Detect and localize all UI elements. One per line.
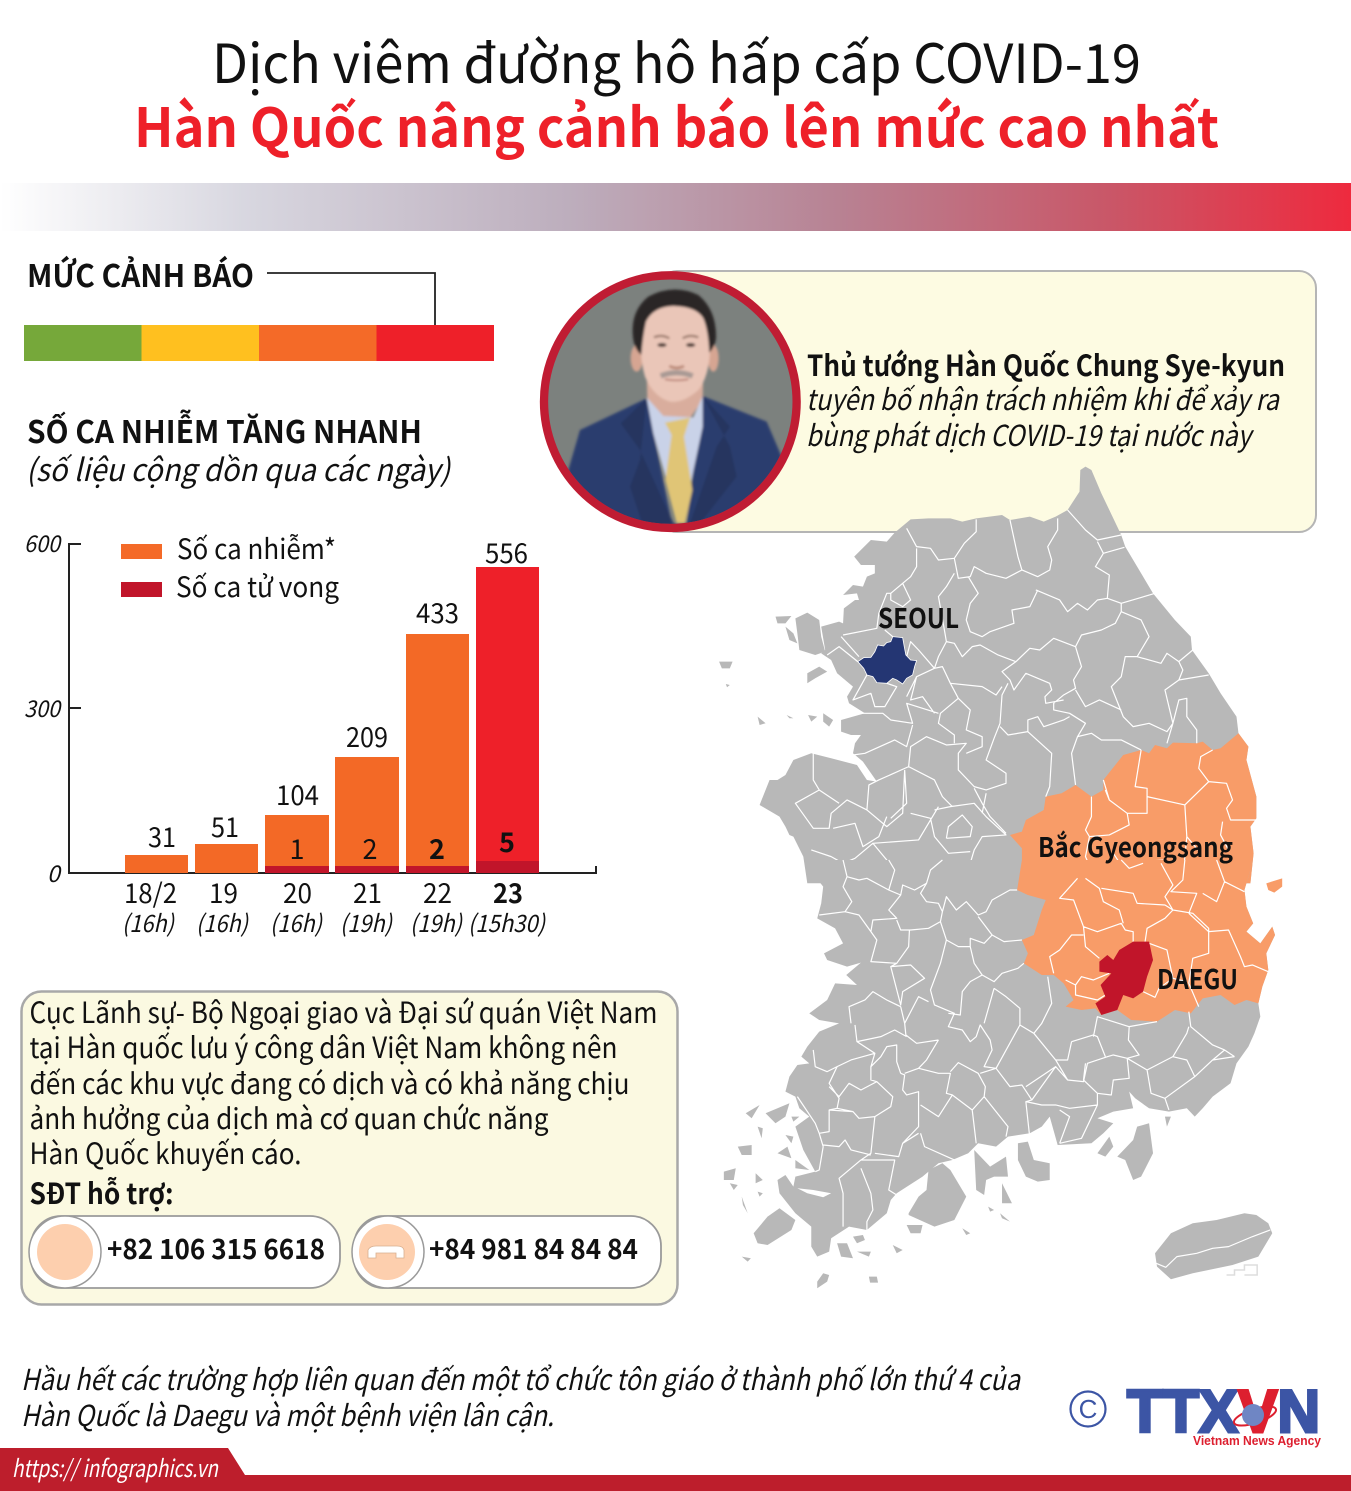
copyright mark [1070,1392,1106,1426]
y axis labels [24,525,63,889]
title line 1: Dịch viêm đường hô hấp cấp COVID-19 [212,20,1141,99]
advisory text: Cục Lãnh sự- Bộ Ngoại giao và Đại sứ quán Việt Nam [30,990,658,1032]
phone pill 2: +84 981 84 84 84 [429,1228,638,1268]
death values [290,821,515,867]
white bay cut [797,1188,831,1197]
advisory text: đến các khu vực đang có dịch và có khả năng chịu [30,1061,630,1103]
hair [633,290,716,355]
callout text [806,343,1285,455]
neck [646,381,705,419]
map: southern provinces [724,860,1282,1288]
island: Ulleung [1266,878,1282,893]
label: Daegu: DAEGU [1157,958,1238,997]
inset frame on Jeju [1227,1265,1257,1275]
footer bar [0,1448,1351,1491]
title line 2: Hàn Quốc nâng cảnh báo lên mức cao nhất [134,84,1219,163]
footnote: Hàn Quốc là Daegu và một bệnh viện lân cận. [21,1393,554,1435]
y axis labels: 600 [24,525,63,559]
map labels [878,597,1238,997]
case values: 556 [485,532,528,571]
panel: prime minister callout [660,271,1316,532]
northern landmass [760,467,1256,883]
province: Bac Gyeongsang north [1010,733,1256,883]
footnote [21,1357,1021,1435]
district borders north [795,510,1209,883]
y axis labels: 0 [47,855,63,889]
date labels: 22 [423,872,452,911]
chart subheading: (số liệu cộng dồn qua các ngày) [26,445,451,490]
advisory text [30,990,658,1173]
map: northern provinces [719,467,1256,883]
title [134,20,1219,163]
map of South Korea [719,467,1282,1288]
province: Seoul [858,637,917,684]
y axis labels: 300 [24,690,63,724]
facial features [654,336,698,380]
panel: consular advisory [22,990,678,1304]
legend: Số ca nhiễm* [177,528,336,568]
advisory text: ảnh hưởng của dịch mà cơ quan chức năng [30,1096,548,1138]
district borders south [797,860,1270,1267]
legend [121,528,339,606]
portrait photo [544,275,797,528]
advisory text: tại Hàn quốc lưu ý công dân Việt Nam không nên [30,1025,618,1067]
label: Bac Gyeongsang: Bắc Gyeongsang [1038,826,1233,865]
date labels: 23 [493,872,523,911]
phone pill 2 [352,1216,661,1288]
death values: 2 [429,828,445,867]
death values: 2 [362,828,378,867]
time labels: (16h) [196,904,249,939]
lapel shading [621,396,737,527]
phone pill 1 [29,1216,340,1288]
portrait ring [544,275,797,528]
copyright mark: C [1079,1394,1097,1424]
phone pill 1: +82 106 315 6618 [107,1228,325,1268]
icon: phone handset [368,1246,404,1258]
case values: 209 [346,716,388,755]
province: Bac Gyeongsang south [1017,860,1275,1022]
date labels: 20 [283,872,312,911]
case values: 31 [148,816,176,855]
support heading: SĐT hỗ trợ: [30,1171,174,1213]
callout italic line 1: tuyên bố nhận trách nhiệm khi để xảy ra [806,377,1280,419]
island: Jeju [1155,1213,1272,1279]
date labels: 21 [353,872,382,911]
southern landmass [777,860,1275,1257]
province: Daegu [1095,942,1153,1015]
district borders Gyeongsang north [1083,750,1256,883]
ears [631,345,643,372]
label: Seoul: SEOUL [878,597,959,636]
case values: 51 [211,806,239,845]
chart heading [26,407,451,490]
case values [148,532,528,855]
date labels [124,872,523,911]
time labels [122,904,546,939]
shirt [644,396,705,482]
time labels: (15h30) [468,904,546,939]
legend: Số ca tử vong [176,566,339,606]
axes [69,544,596,873]
warning pointer line [267,273,435,325]
date labels: 19 [209,872,238,911]
panel: warning level [24,251,494,361]
bars [125,567,539,873]
advisory box [22,992,678,1304]
footnote: Hầu hết các trường hợp liên quan đến một tổ chức tôn giáo ở thành phố lớn thứ 4 của [21,1357,1021,1399]
date labels: 18/2 [124,872,177,911]
globe emblem [1232,1403,1278,1429]
case values: 104 [276,774,319,813]
advisory text: Hàn Quốc khuyến cáo. [30,1131,302,1173]
suit [563,396,783,527]
agency name: Vietnam News Agency [1193,1433,1322,1448]
gradient band [0,183,1351,231]
death values: 5 [499,821,515,860]
tie [665,418,692,523]
callout bold line: Thủ tướng Hàn Quốc Chung Sye-kyun [807,343,1285,385]
face [641,304,710,402]
death values: 1 [290,828,304,867]
callout italic line 2: bùng phát dịch COVID-19 tại nước này [806,413,1254,455]
case values: 433 [416,592,459,631]
time labels: (19h) [340,904,393,939]
warning heading: MỨC CẢNH BÁO [27,251,254,296]
warning scale bar [24,325,494,361]
bar chart [24,525,596,939]
time labels: (16h) [270,904,323,939]
chart heading bold: SỐ CA NHIỄM TĂNG NHANH [27,407,422,452]
west sea islands [719,613,833,727]
southern islands [724,1103,1171,1288]
time labels: (19h) [410,904,463,939]
logo: TTXVN [1070,1378,1322,1448]
time labels: (16h) [122,904,175,939]
wordmark: TTXVN [1127,1378,1320,1445]
footer url: https:// infographics.vn [12,1449,219,1484]
